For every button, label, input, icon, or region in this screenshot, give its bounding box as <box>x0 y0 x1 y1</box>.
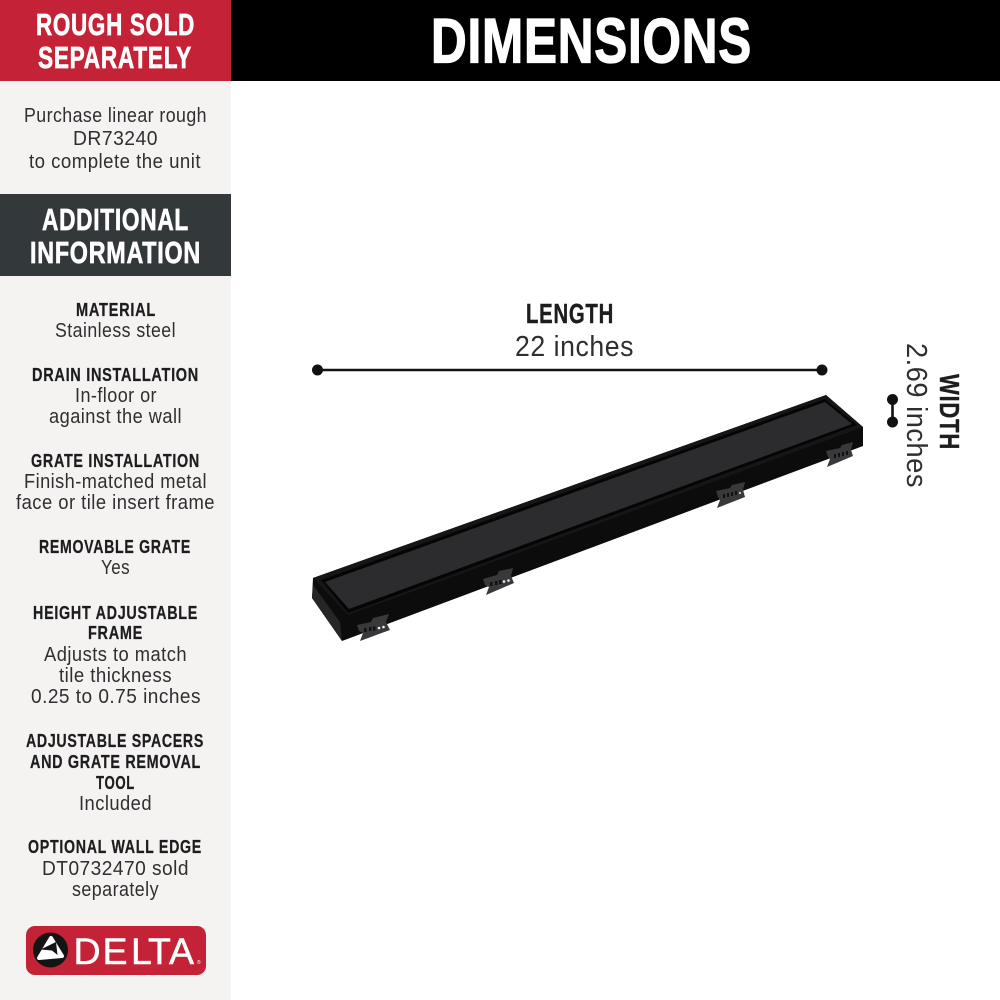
arrow: length dimension line <box>312 364 828 376</box>
sidebar background <box>0 0 231 1000</box>
spec: optional wall edge: separately <box>72 879 159 901</box>
spec: grate installation <box>16 450 215 514</box>
clip 4 <box>826 442 853 467</box>
logo: delta: DELTA <box>74 930 194 972</box>
width label: 2.69 inches <box>900 343 932 488</box>
spec: drain installation: In-floor or <box>75 385 157 407</box>
arrow: width dimension line <box>887 394 898 428</box>
panel: additional information heading <box>0 194 231 276</box>
clip 3 <box>716 482 745 508</box>
text block: purchase rough note: Purchase linear rough <box>24 105 207 127</box>
spec: removable grate: REMOVABLE GRATE <box>39 536 191 557</box>
clip 2 <box>483 568 514 595</box>
width label: WIDTH <box>934 374 965 450</box>
title: DIMENSIONS <box>431 6 752 76</box>
length label: LENGTH <box>526 298 614 329</box>
product: linear drain <box>312 395 863 641</box>
spec: height adjustable frame: HEIGHT ADJUSTABLE <box>33 602 198 623</box>
spec: optional wall edge: DT0732470 sold <box>42 858 189 880</box>
panel: rough sold separately heading: SEPARATELY <box>38 40 192 75</box>
logo: delta: ® <box>197 959 201 966</box>
spec: optional wall edge <box>28 836 202 901</box>
spec: drain installation <box>32 364 199 428</box>
spec: adjustable spacers and grate removal tool: Included <box>79 793 152 815</box>
logo: delta <box>26 926 206 975</box>
spec: height adjustable frame <box>31 602 201 708</box>
spec: material <box>55 299 176 342</box>
length label <box>515 298 634 363</box>
spec: removable grate: Yes <box>101 557 130 579</box>
spec: height adjustable frame: Adjusts to match <box>44 644 187 666</box>
spec: adjustable spacers and grate removal tool: ADJUSTABLE SPACERS <box>26 730 204 751</box>
spec: height adjustable frame: FRAME <box>88 622 143 643</box>
text block: purchase rough note: to complete the unit <box>29 151 201 173</box>
spec: adjustable spacers and grate removal tool: AND GRATE REMOVAL <box>30 751 201 772</box>
text block: purchase rough note: DR73240 <box>73 128 158 150</box>
panel: additional information heading: ADDITIONAL <box>42 202 189 237</box>
spec: height adjustable frame: tile thickness <box>59 665 172 687</box>
clip 1 <box>357 614 390 641</box>
width label <box>900 343 965 488</box>
spec: grate installation: GRATE INSTALLATION <box>31 450 200 471</box>
spec: material: Stainless steel <box>55 320 176 342</box>
spec: removable grate <box>39 536 191 579</box>
drain grate panel <box>321 399 857 613</box>
spec: drain installation: DRAIN INSTALLATION <box>32 364 199 385</box>
icon: delta emblem <box>33 932 68 968</box>
spec: adjustable spacers and grate removal tool: TOOL <box>96 772 135 793</box>
panel: rough sold separately heading: ROUGH SOLD <box>36 7 195 42</box>
header bar: dimensions <box>231 0 1000 81</box>
spec: height adjustable frame: 0.25 to 0.75 inches <box>31 686 201 708</box>
spec: adjustable spacers and grate removal tool <box>26 730 204 815</box>
spec: grate installation: Finish-matched metal <box>24 471 207 493</box>
length label: 22 inches <box>515 331 634 363</box>
spec: material: MATERIAL <box>76 299 156 320</box>
drain body <box>312 395 863 641</box>
spec: drain installation: against the wall <box>49 406 182 428</box>
spec: grate installation: face or tile insert frame <box>16 492 215 514</box>
panel: additional information heading: INFORMATION <box>30 235 201 270</box>
drain top frame <box>313 395 863 615</box>
panel: rough sold separately heading <box>0 0 231 81</box>
text block: purchase rough note <box>24 105 207 173</box>
spec: optional wall edge: OPTIONAL WALL EDGE <box>28 836 202 857</box>
